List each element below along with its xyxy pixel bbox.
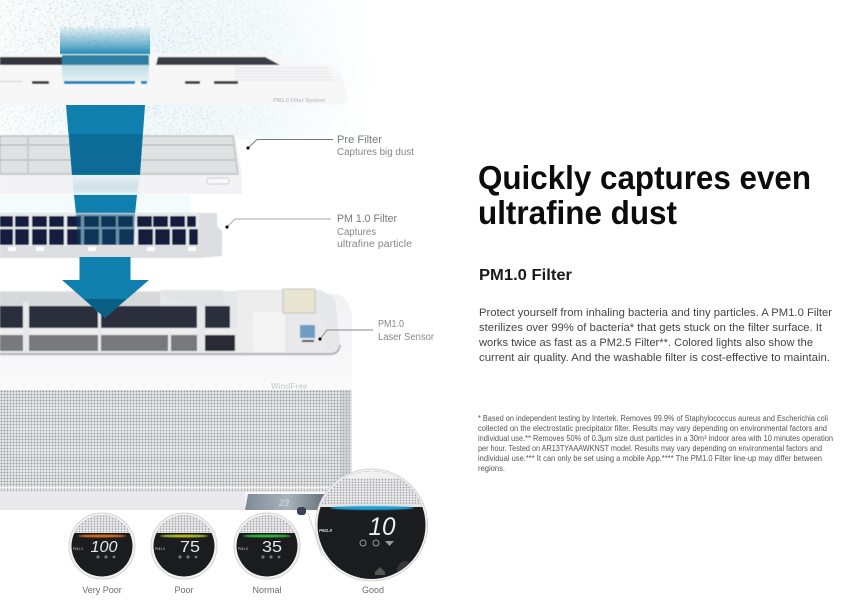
footnote: collected on the electrostatic precipitator filter. Results may vary depending on environmental factors and	[478, 424, 827, 433]
callout: PM 1.0 filter	[225, 213, 412, 250]
air flow arrow	[62, 257, 149, 318]
display strip	[245, 494, 330, 510]
indicator: good magnified	[307, 469, 428, 582]
lower grille strip	[0, 488, 335, 492]
pre filter	[0, 135, 242, 194]
indicator: very poor: PM1.0	[73, 547, 83, 551]
panel label: PM1.0 Filter System	[273, 98, 325, 104]
indicator: poor	[150, 512, 218, 580]
indicator: normal: 35	[262, 539, 282, 556]
panel air slot left	[0, 57, 148, 65]
indicator: good magnified: PM1.0	[319, 528, 333, 533]
indicator: normal: PM1.0	[238, 547, 248, 551]
body text	[478, 307, 832, 364]
title: Quickly captures even	[478, 159, 811, 196]
footnote: * Based on independent testing by Intertek. Removes 99.9% of Staphylococcus aureus and Escherichia coli	[478, 414, 828, 423]
lower unit body	[0, 294, 352, 515]
subheading: PM1.0 Filter	[479, 267, 572, 284]
title: ultrafine dust	[478, 194, 677, 231]
callout: pre filter: Pre Filter	[337, 134, 382, 146]
top front panel	[0, 54, 348, 105]
brand: WindFree	[271, 382, 308, 391]
label: poor: Poor	[174, 585, 194, 595]
filter beam tint	[76, 214, 135, 245]
air flow beam upper	[60, 26, 150, 56]
indicator: poor: PM1.0	[155, 547, 165, 551]
PM 1.0 filter	[0, 213, 222, 258]
title	[478, 159, 811, 231]
lower unit body: 23	[278, 498, 289, 508]
callout: laser sensor: Laser Sensor	[378, 332, 435, 343]
body text: sterilizes over 99% of bacteria* that gets stuck on the filter surface. It	[479, 322, 822, 334]
body text: works twice as fast as a PM2.5 Filter**. Colored lights also show the	[478, 337, 813, 349]
footnote	[478, 414, 833, 473]
footnote: regions.	[478, 464, 505, 473]
unit interior	[0, 289, 340, 356]
arrow stem	[80, 257, 130, 281]
indicator: good magnified: 10	[368, 513, 396, 541]
indicator: very poor: 100	[90, 539, 118, 556]
panel air slot right	[156, 57, 280, 65]
panel beam overlay	[62, 55, 149, 82]
label: very poor: Very Poor	[82, 585, 122, 595]
footnote: per hour. Tested on AR13TYAAAWKNST model. Results may vary depending on environmental factors and	[478, 444, 822, 453]
arrow head	[62, 280, 149, 318]
callout: pre filter: Captures big dust	[337, 147, 414, 158]
callout: pre filter	[246, 134, 414, 158]
indicator: normal	[233, 512, 301, 580]
callout: laser sensor	[318, 319, 435, 343]
air flow beam through pre filter	[66, 105, 145, 214]
dust cloud background	[0, 0, 324, 213]
body text: current air quality. And the washable filter is cost-effective to maintain.	[479, 352, 830, 364]
label: normal: Normal	[252, 585, 282, 595]
callout: laser sensor: PM1.0	[378, 319, 404, 330]
callout: PM 1.0 filter: PM 1.0 Filter	[337, 213, 397, 225]
grille	[0, 390, 350, 487]
indicator: poor: 75	[180, 539, 200, 556]
footnote: individual use.*** It can only be set using a mobile App.**** The PM1.0 Filter line-up may differ between	[478, 454, 822, 463]
indicator: very poor	[68, 512, 136, 580]
label: good: Good	[362, 585, 384, 595]
body text: Protect yourself from inhaling bacteria and tiny particles. A PM1.0 Filter	[479, 307, 832, 319]
sensor knob	[297, 507, 306, 515]
callout: PM 1.0 filter: ultrafine particle	[337, 239, 412, 250]
callout: PM 1.0 filter: Captures	[337, 227, 376, 238]
